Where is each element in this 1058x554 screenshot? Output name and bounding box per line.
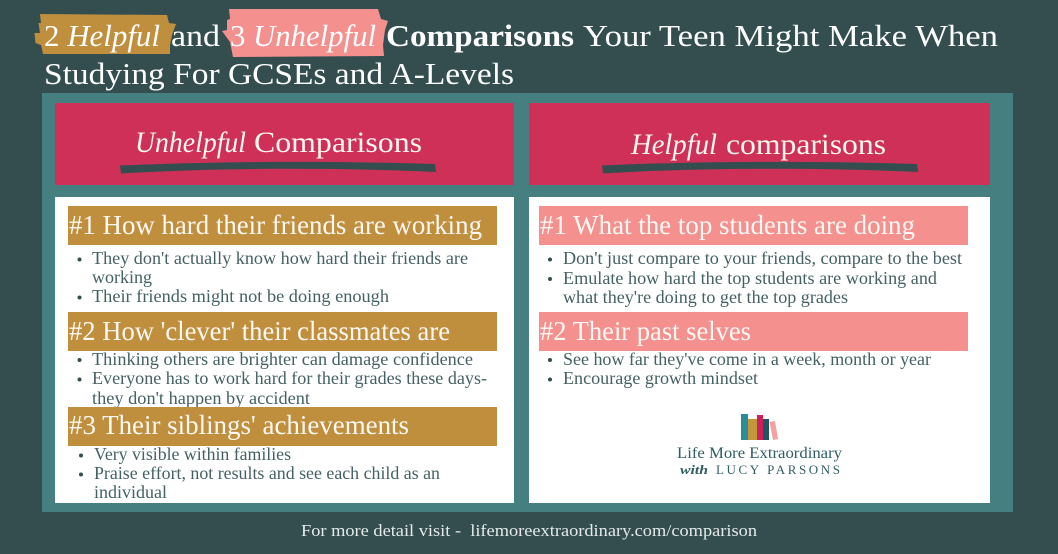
title text: 2 Helpful [44, 18, 160, 53]
item 1 bullets: Don't just compare to your friends, compare to the best [563, 248, 962, 268]
item 3 bullets [79, 444, 440, 502]
item 2 bullets [78, 349, 487, 408]
item 1 bullets: They don't actually know how hard their friends are [92, 248, 468, 268]
item 1 bullets: working [92, 267, 152, 287]
panel: helpful list [529, 197, 990, 503]
item 1 heading: #1 What the top students are doing [540, 209, 915, 240]
title [34, 9, 999, 91]
item 2 heading [539, 312, 968, 351]
item 2 bullets: Everyone has to work hard for their grades these days- [92, 368, 487, 388]
title text: Your Teen Might Make When [583, 18, 999, 53]
title text [44, 18, 999, 91]
logo: with [680, 462, 708, 477]
title text: 3 Unhelpful [230, 18, 376, 53]
panel: unhelpful list [55, 197, 514, 503]
item 2 heading: #2 How 'clever' their classmates are [69, 315, 450, 346]
title text: Studying For GCSEs and A-Levels [44, 56, 514, 91]
title text: Comparisons [386, 18, 574, 53]
item 3 bullets: Very visible within families [94, 444, 291, 464]
item 2 bullets: they don't happen by accident [92, 388, 310, 408]
item 2 bullets: Thinking others are brighter can damage confidence [92, 349, 473, 369]
item 1 heading: #1 How hard their friends are working [69, 209, 482, 240]
highlight: helpful [34, 14, 176, 54]
icon: books [741, 414, 778, 440]
item 1 bullets [548, 248, 962, 307]
item 1 bullets [78, 248, 468, 306]
logo: LUCY PARSONS [716, 462, 840, 477]
header: unhelpful comparisons: Unhelpful [135, 126, 246, 159]
item 3 bullets: Praise effort, not results and see each child as an [94, 463, 440, 483]
logo [677, 414, 842, 477]
teal panel [42, 93, 1013, 512]
item 3 heading [68, 407, 497, 446]
title text: and [171, 18, 221, 53]
header: unhelpful comparisons: Comparisons [254, 126, 422, 159]
underline stroke [120, 162, 436, 174]
header: helpful comparisons: comparisons [726, 128, 886, 161]
header: helpful comparisons: Helpful [630, 128, 717, 161]
item 1 bullets: what they're doing to get the top grades [563, 287, 848, 307]
item 3 heading: #3 Their siblings' achievements [69, 409, 409, 440]
item 1 bullets: Their friends might not be doing enough [92, 286, 389, 306]
footer: For more detail visit - lifemoreextraordinary.com/comparison [301, 521, 758, 540]
header: helpful comparisons [529, 103, 990, 185]
logo: Life More Extraordinary [677, 445, 842, 462]
underline stroke [602, 162, 918, 174]
item 2 bullets: See how far they've come in a week, month or year [563, 349, 931, 369]
header: unhelpful comparisons [55, 103, 514, 185]
item 1 bullets: Emulate how hard the top students are working and [563, 268, 937, 288]
item 2 bullets: Encourage growth mindset [563, 368, 758, 388]
item 2 bullets [548, 349, 931, 388]
item 2 heading: #2 Their past selves [540, 315, 751, 346]
highlight: unhelpful [222, 9, 388, 57]
item 3 bullets: individual [94, 482, 167, 502]
